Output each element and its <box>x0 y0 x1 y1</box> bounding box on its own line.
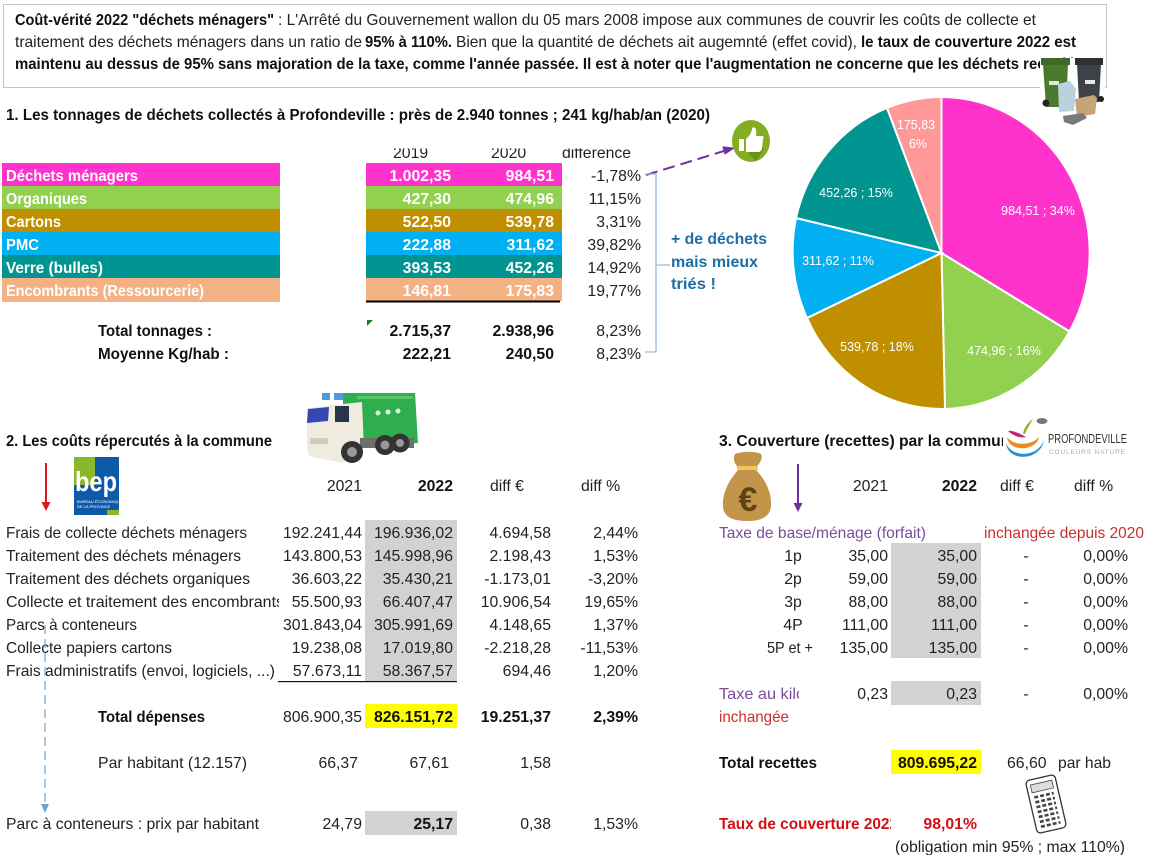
column headers <box>394 148 630 158</box>
pie labels: 175,83 <box>897 118 935 132</box>
row labels: Verre (bulles) <box>6 260 103 277</box>
total recettes: par hab <box>1058 755 1111 772</box>
row values: 522,50 <box>403 214 451 231</box>
taxe au kilo: 0,00% <box>1083 686 1128 703</box>
row values: 175,83 <box>506 283 554 300</box>
cost rows <box>6 525 638 682</box>
cost rows: 1,53% <box>593 548 638 565</box>
taxe au kilo: - <box>1023 686 1029 703</box>
pie labels: 474,96 ; 16% <box>967 344 1041 358</box>
total recettes: 809.695,22 <box>898 755 977 772</box>
logo: BEP <box>74 457 123 515</box>
column headers: 2020 <box>491 145 526 162</box>
household rows: 0,00% <box>1083 617 1128 634</box>
household rows: - <box>1023 571 1029 588</box>
pie labels <box>802 118 1075 358</box>
household rows: 0,00% <box>1083 571 1128 588</box>
callout: plus de déchets: + de déchets <box>671 231 767 248</box>
cost rows: 17.019,80 <box>383 640 453 657</box>
header line 1: : L'Arrêté du Gouvernement wallon du 05 mars 2008 impose aux communes de couvrir les coûts de collecte et <box>278 12 1037 29</box>
total dépenses: 19.251,37 <box>481 709 551 726</box>
par habitant: 67,61 <box>409 755 449 772</box>
parc à conteneurs: Parc à conteneurs : prix par habitant <box>6 816 260 833</box>
taux de couverture <box>719 818 977 832</box>
pie labels: 311,62 ; 11% <box>802 254 874 268</box>
icon: money bag <box>723 452 771 521</box>
row values: 3,31% <box>596 214 641 231</box>
household rows: 111,00 <box>842 617 888 634</box>
arrow: purple dashed to thumb <box>646 147 734 175</box>
icon: waste bins <box>1040 58 1105 127</box>
column headers: diff % <box>1074 478 1113 495</box>
row values: 14,92% <box>587 260 641 277</box>
row values: 311,62 <box>507 237 554 254</box>
taux de couverture: 98,01% <box>923 816 977 833</box>
header line 1: Coût-vérité 2022 "déchets ménagers" <box>15 12 274 29</box>
taux de couverture: Taux de couverture 2022 <box>719 816 898 833</box>
logo: BEP: BUREAU ÉCONOMIQUE <box>77 499 123 504</box>
cost rows: 55.500,93 <box>292 594 362 611</box>
row values: 393,53 <box>403 260 451 277</box>
pie slice: cartons <box>807 253 945 409</box>
callout: plus de déchets: triés ! <box>671 276 716 293</box>
totals: 2.715,37 <box>390 323 451 340</box>
bracket <box>645 174 670 352</box>
cost rows: 1,20% <box>593 663 638 680</box>
row values: 146,81 <box>403 283 451 300</box>
cost rows: 2,44% <box>593 525 638 542</box>
callout: plus de déchets <box>671 231 767 293</box>
cost rows: 19.238,08 <box>292 640 362 657</box>
cost rows: 4.148,65 <box>490 617 551 634</box>
callout: plus de déchets: mais mieux <box>671 254 758 271</box>
totals: 2.938,96 <box>492 323 554 340</box>
household rows: - <box>1023 548 1029 565</box>
household rows: 0,00% <box>1083 640 1128 657</box>
cost rows: 4.694,58 <box>490 525 551 542</box>
column headers: 2021 <box>327 478 362 495</box>
cost rows: 19,65% <box>584 594 638 611</box>
header line 3: maintenu au dessus de 95% sans majoration de la taxe, comme l'année passée. Il est à noter que l'augmentation ne concerne que les déchets recyclés. <box>15 56 1087 73</box>
row labels: PMC <box>6 237 39 254</box>
cost rows: 35.430,21 <box>383 571 453 588</box>
parc à conteneurs <box>6 811 638 835</box>
row values: 427,30 <box>403 191 451 208</box>
parc à conteneurs: 25,17 <box>413 816 453 833</box>
row labels: Cartons <box>6 214 61 231</box>
coloured rows <box>2 163 562 302</box>
household rows: 59,00 <box>937 571 977 588</box>
totals: Moyenne Kg/hab : <box>98 346 229 363</box>
arrow: purple down <box>794 464 802 512</box>
household rows: 59,00 <box>848 571 888 588</box>
grey 2022 column <box>365 520 457 681</box>
row values: 222,88 <box>403 237 451 254</box>
taxe au kilo: Taxe au kilo <box>719 686 805 703</box>
row values: -1,78% <box>591 168 641 185</box>
row values: 474,96 <box>506 191 554 208</box>
logo: BEP: bep <box>75 466 117 497</box>
totals: 240,50 <box>506 346 554 363</box>
pie labels: 984,51 ; 34% <box>1001 204 1075 218</box>
cost rows: 143.800,53 <box>283 548 362 565</box>
parc à conteneurs: 24,79 <box>322 816 362 833</box>
row values <box>390 168 641 300</box>
total dépenses: 2,39% <box>593 709 638 726</box>
totals: 8,23% <box>596 346 641 363</box>
cost rows: 305.991,69 <box>374 617 453 634</box>
pie labels: 452,26 ; 15% <box>819 186 893 200</box>
household rows: 135,00 <box>929 640 977 657</box>
panel: header text box <box>4 4 1106 88</box>
logo: Profondeville <box>1006 418 1127 457</box>
row labels <box>6 168 204 300</box>
cost rows: Frais administratifs (envoi, logiciels, ...) <box>6 663 275 680</box>
row labels: Organiques <box>6 191 87 208</box>
row values: 11,15% <box>589 191 641 208</box>
household rows: 111,00 <box>931 617 977 634</box>
household rows: 135,00 <box>840 640 888 657</box>
household rows: 5P et + <box>767 640 813 657</box>
panel: tonnages table <box>2 145 641 363</box>
column headers: 2021 <box>853 478 888 495</box>
cost rows: -3,20% <box>588 571 638 588</box>
cost rows: Traitement des déchets ménagers <box>6 548 241 565</box>
par habitant: Par habitant (12.157) <box>98 755 247 772</box>
cost rows: Parcs à conteneurs <box>6 617 137 634</box>
row labels: Déchets ménagers <box>6 168 138 185</box>
cost rows: Collecte papiers cartons <box>6 640 172 657</box>
cost rows: 66.407,47 <box>383 594 453 611</box>
row labels: Encombrants (Ressourcerie) <box>6 283 204 300</box>
pie slice: encombrants <box>887 97 942 253</box>
cost rows: -1.173,01 <box>484 571 551 588</box>
column headers: diff € <box>490 478 524 495</box>
household rows: 3p <box>784 594 802 611</box>
cost rows: Collecte et traitement des encombrants <box>6 594 284 611</box>
logo: BEP: DE LA PROVINCE <box>77 504 111 509</box>
total recettes: Total recettes <box>719 755 817 772</box>
household rows: 2p <box>784 571 802 588</box>
row values: 539,78 <box>506 214 554 231</box>
household rows: - <box>1023 640 1029 657</box>
column headers: 2022 <box>418 478 453 495</box>
column headers: diff % <box>581 478 620 495</box>
total dépenses: 806.900,35 <box>283 709 362 726</box>
header line 2: 95% à 110%. <box>365 34 452 51</box>
column headers: 2019 <box>393 145 428 162</box>
household rows: 1p <box>784 548 802 565</box>
cost rows: 58.367,57 <box>383 663 453 680</box>
household rows: 88,00 <box>937 594 977 611</box>
heading 3: 3. Couverture (recettes) par la commune <box>719 433 1019 450</box>
cost rows: 192.241,44 <box>283 525 362 542</box>
cost rows: -11,53% <box>580 640 638 657</box>
header line 2: le taux de couverture 2022 est <box>861 34 1077 51</box>
cost rows: Traitement des déchets organiques <box>6 571 250 588</box>
heading 1: 1. Les tonnages de déchets collectés à Profondeville : près de 2.940 tonnes ; 241 kg/hab/an (2020) <box>6 107 710 124</box>
row values: 19,77% <box>587 283 641 300</box>
taxe au kilo <box>719 681 1128 726</box>
total dépenses <box>98 704 638 728</box>
household rows: - <box>1023 594 1029 611</box>
cost rows: 196.936,02 <box>374 525 453 542</box>
panel: costs table <box>6 478 638 835</box>
header line 2: traitement des déchets ménagers dans un ratio de <box>15 34 362 51</box>
household rows: 35,00 <box>937 548 977 565</box>
taxe au kilo: inchangée <box>719 709 789 726</box>
arrow: blue dashed down <box>41 625 49 813</box>
household rows: 88,00 <box>848 594 888 611</box>
taxe de base line: inchangée depuis 2020 <box>984 525 1144 542</box>
grey 2022 column <box>891 543 981 658</box>
totals <box>98 320 641 363</box>
taxe de base line <box>719 525 1144 542</box>
total dépenses: Total dépenses <box>98 709 205 726</box>
total recettes <box>719 750 1111 774</box>
totals: Total tonnages : <box>98 323 212 340</box>
taxe au kilo: 0,23 <box>946 686 977 703</box>
panel: revenue table <box>719 478 1144 855</box>
icon: garbage truck <box>307 393 418 463</box>
pie slice: verre <box>796 108 942 253</box>
totals: 222,21 <box>403 346 451 363</box>
column headers: difference <box>562 145 631 162</box>
household rows <box>767 548 1128 657</box>
column headers <box>327 478 620 495</box>
row values: 984,51 <box>506 168 554 185</box>
household rows: 0,00% <box>1083 594 1128 611</box>
pie labels: 539,78 ; 18% <box>840 340 914 354</box>
household rows: 4P <box>783 617 803 634</box>
cost rows: 2.198,43 <box>490 548 551 565</box>
cost rows: 694,46 <box>503 663 551 680</box>
pie slice: organiques <box>942 253 1070 409</box>
column headers: diff € <box>1000 478 1034 495</box>
cost rows: Frais de collecte déchets ménagers <box>6 525 247 542</box>
row values: 39,82% <box>587 237 641 254</box>
header line 2: Bien que la quantité de déchets ait augemnté (effet covid), <box>456 34 857 51</box>
taxe de base line: Taxe de base/ménage (forfait) <box>719 525 926 542</box>
total dépenses: 826.151,72 <box>374 709 453 726</box>
pie labels: 6% <box>909 137 927 151</box>
cost rows: 301.843,04 <box>283 617 362 634</box>
cost rows: 57.673,11 <box>293 663 362 680</box>
cost rows: 145.998,96 <box>374 548 453 565</box>
icon: money bag: € <box>739 481 758 519</box>
icon: calculator <box>1025 774 1067 834</box>
column headers: 2022 <box>942 478 977 495</box>
icon: thumbs up <box>732 120 770 162</box>
par habitant <box>98 755 551 772</box>
pie slice: PMC <box>793 218 942 318</box>
cost rows: 1,37% <box>593 617 638 634</box>
par habitant: 1,58 <box>520 755 551 772</box>
cost rows: 10.906,54 <box>481 594 551 611</box>
logo: Profondeville: COULEURS NATURE <box>1049 449 1126 456</box>
column headers <box>853 478 1113 495</box>
household rows: 0,00% <box>1083 548 1128 565</box>
household rows: 35,00 <box>848 548 888 565</box>
taxe au kilo: 0,23 <box>857 686 888 703</box>
pie chart <box>793 97 1090 409</box>
parc à conteneurs: 1,53% <box>593 816 638 833</box>
row values: 452,26 <box>506 260 554 277</box>
cost rows: -2.218,28 <box>484 640 551 657</box>
row values: 1.002,35 <box>390 168 451 185</box>
totals: 8,23% <box>596 323 641 340</box>
header line 2 <box>15 34 1077 51</box>
parc à conteneurs: 0,38 <box>520 816 551 833</box>
pie slice: déchets ménagers <box>942 97 1090 332</box>
arrow: red down <box>42 463 50 511</box>
par habitant: 66,37 <box>318 755 358 772</box>
total recettes: 66,60 <box>1007 755 1047 772</box>
cost rows: 36.603,22 <box>292 571 362 588</box>
heading 2: 2. Les coûts répercutés à la commune <box>6 433 272 450</box>
household rows: - <box>1023 617 1029 634</box>
